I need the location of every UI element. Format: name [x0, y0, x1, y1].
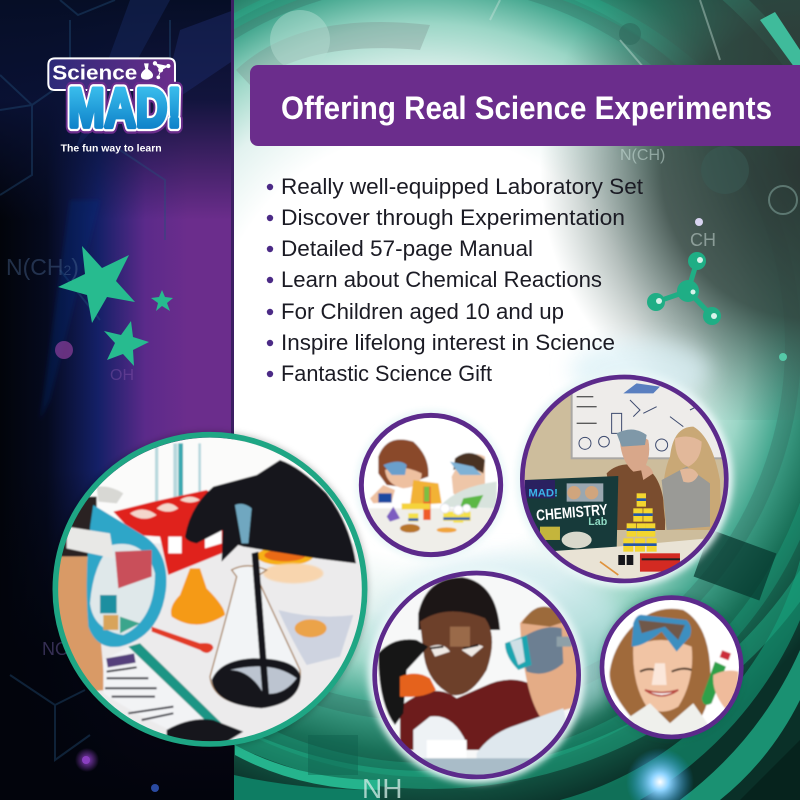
icon: small star [151, 290, 173, 311]
logo tagline: The fun way to learn [61, 144, 162, 155]
photo: scientist with flask and student in goggles [368, 567, 585, 783]
heading text: Offering Real Science Experiments [281, 90, 772, 126]
icon: large star [58, 246, 135, 323]
logo wordmark: MAD!: MAD! [68, 77, 182, 139]
logo badge: Science: Science [52, 61, 137, 84]
logo wordmark: MAD!: MAD! [68, 77, 182, 139]
blue goggles [87, 505, 166, 647]
bullet 7: Fantastic Science Gift [281, 361, 492, 386]
photo: large lab experiment circle [52, 430, 368, 750]
icon: molecule [647, 252, 721, 325]
bullet 4: Learn about Chemical Reactions [281, 267, 602, 292]
lab coat [628, 702, 708, 734]
blue goggles [632, 615, 691, 652]
panel: left background: NO [42, 639, 69, 659]
black gloved hand [185, 460, 356, 563]
white lab coat and equipment [476, 708, 566, 759]
girl left [607, 464, 665, 530]
icon: green stars [58, 246, 173, 366]
heading banner [250, 65, 800, 146]
bullet 2: Discover through Experimentation [281, 205, 625, 230]
photo: two girls with chemistry lab box: MAD! [528, 488, 558, 500]
panel: right background with green rings: CH [690, 230, 716, 250]
photo: two girls with chemistry lab box: Lab [588, 516, 608, 528]
photo: two girls with chemistry lab box [516, 371, 733, 587]
hair and skin behind goggles [62, 496, 98, 558]
photo: two children with goggles [356, 410, 506, 560]
student with goggles [520, 607, 578, 717]
panel: left background [0, 0, 234, 800]
photo: smiling girl with test tube [599, 595, 744, 740]
orange flask [400, 674, 436, 697]
bullet 5: For Children aged 10 and up [281, 299, 564, 324]
panel: right background with green rings [234, 0, 800, 800]
girl right [663, 427, 722, 530]
photos: four purple-ringed circles [356, 371, 744, 783]
red scoop [152, 627, 213, 653]
orange dish [257, 547, 313, 565]
manual [102, 649, 201, 728]
panel: right background with green rings: N(CH) [620, 147, 665, 164]
red test tube rack [113, 490, 228, 575]
table and containers [555, 538, 704, 579]
bullet 1: Really well-equipped Laboratory Set [281, 174, 643, 199]
green test tube and hand [702, 662, 726, 705]
bullet 3: Detailed 57-page Manual [281, 236, 533, 261]
photo: two girls with chemistry lab box: CHEMISTRY [536, 501, 608, 525]
panel: left background: OH [110, 367, 134, 384]
icon: medium star [104, 321, 149, 366]
bullet dots [267, 184, 273, 377]
bullet list [267, 174, 643, 386]
logo wordmark: MAD!: MAD! [68, 77, 182, 139]
conical flask [210, 566, 300, 707]
panel: left background: N(CH2) [6, 254, 79, 280]
orange funnel [171, 568, 225, 625]
paper with orange stain [278, 610, 353, 665]
chemistry lab box [525, 476, 618, 557]
bullet 6: Inspire lifelong interest in Science [281, 330, 615, 355]
black glove [378, 639, 428, 725]
logo: Science Mad [48, 58, 182, 155]
